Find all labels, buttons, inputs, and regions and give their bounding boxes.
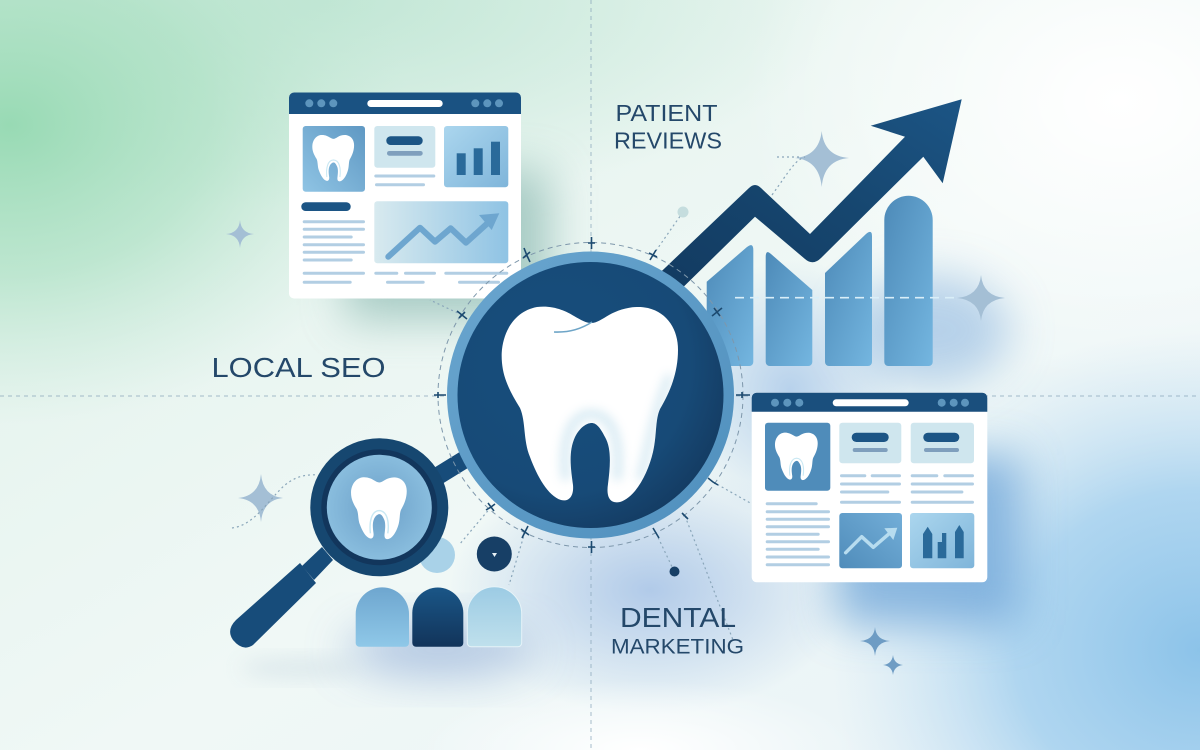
magnifier handle link to hub [420, 450, 480, 487]
growth arrow [645, 99, 962, 305]
label: dental marketing: DENTAL [620, 602, 736, 633]
text card left [839, 423, 901, 463]
heading pill and paragraph [301, 202, 365, 262]
text lines [766, 474, 974, 566]
label: patient reviews: PATIENT [616, 100, 718, 126]
label: dental marketing: MARKETING [611, 636, 744, 658]
magnifying glass [230, 438, 448, 648]
dashed line over bars [735, 297, 960, 299]
person: left body [356, 587, 409, 647]
soft shadows behind elements [240, 170, 1020, 678]
browser header bar [289, 92, 521, 114]
chart: bar columns [707, 196, 933, 366]
hub: large tooth in circle [447, 252, 734, 538]
browser header bar [752, 393, 987, 412]
sparkle stars [226, 131, 1005, 675]
trend chart tile [839, 513, 902, 568]
panel: search results browser window [289, 92, 521, 298]
person: dark head [477, 536, 512, 572]
mini bar chart tile [910, 513, 974, 568]
footer lines [303, 272, 508, 284]
label: patient reviews [614, 100, 722, 154]
label: patient reviews: REVIEWS [614, 128, 722, 154]
person: light head behind lens [419, 537, 455, 573]
tooth in lens [351, 477, 407, 539]
panel: analytics browser window [752, 393, 987, 582]
person: right body [467, 587, 522, 647]
people icons [356, 536, 522, 647]
mini bar chart tile [444, 126, 508, 187]
magnifier handle [230, 547, 333, 648]
small dots [670, 206, 688, 576]
text lines [374, 174, 435, 186]
magnifier ring [310, 438, 448, 576]
text card [374, 126, 435, 168]
label: local seo: LOCAL SEO [212, 352, 386, 383]
text card right [911, 423, 974, 463]
tooth tile [765, 423, 830, 491]
dotted connector curves [232, 157, 805, 640]
large white tooth [502, 307, 678, 502]
tooth tile [303, 126, 365, 192]
label: dental marketing [611, 602, 744, 658]
person: middle body [412, 588, 463, 647]
trend chart tile [374, 201, 508, 263]
dashed orbit with tick marks [434, 237, 750, 553]
